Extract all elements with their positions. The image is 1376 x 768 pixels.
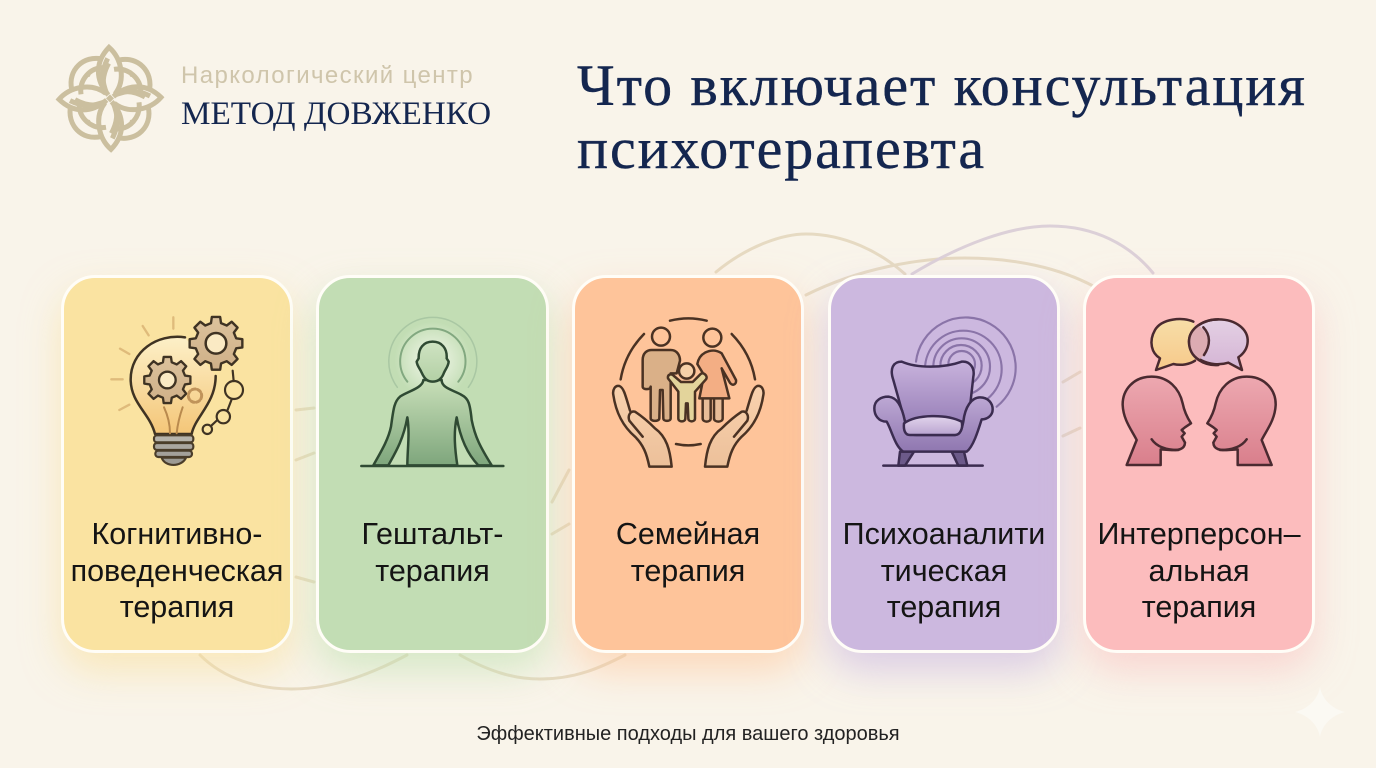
logo subtitle: Наркологический центр — [181, 62, 474, 89]
icon: two heads with speech bubbles — [1121, 318, 1277, 466]
panel: gestalt therapy — [316, 275, 549, 653]
panel: family therapy — [572, 275, 804, 653]
label: тическая — [881, 554, 1007, 588]
panel: psychoanalytic therapy — [828, 275, 1060, 653]
title: психотерапевта — [577, 116, 986, 181]
panel: cognitive behavioral therapy — [61, 275, 293, 653]
title: Что включает консультация — [577, 53, 1307, 118]
label — [362, 517, 503, 588]
icon: person with halo — [360, 316, 505, 468]
label — [616, 517, 760, 588]
label: Гештальт- — [362, 517, 503, 551]
icon: light bulb with gears — [110, 316, 244, 466]
label: Семейная — [616, 517, 760, 551]
icon: armchair with spiral — [873, 316, 1017, 467]
label — [71, 517, 283, 624]
label: Когнитивно- — [92, 517, 262, 551]
label: Интерперсон– — [1097, 517, 1301, 551]
label: терапия — [631, 554, 745, 588]
label: терапия — [887, 590, 1001, 624]
label: терапия — [120, 590, 234, 624]
label — [1097, 517, 1301, 624]
label: терапия — [1142, 590, 1256, 624]
label: поведенческая — [71, 554, 283, 588]
icon: family in hands — [612, 317, 765, 468]
label: Психоаналити — [843, 517, 1045, 551]
icon: sparkle star — [1296, 689, 1343, 735]
label: терапия — [375, 554, 490, 588]
logo name: МЕТОД ДОВЖЕНКО — [181, 95, 491, 132]
logo emblem — [56, 44, 164, 153]
panel: interpersonal therapy — [1083, 275, 1315, 653]
label — [843, 517, 1045, 624]
title — [577, 53, 1307, 181]
footer caption: Эффективные подходы для вашего здоровья — [476, 723, 900, 745]
label: альная — [1148, 554, 1249, 588]
